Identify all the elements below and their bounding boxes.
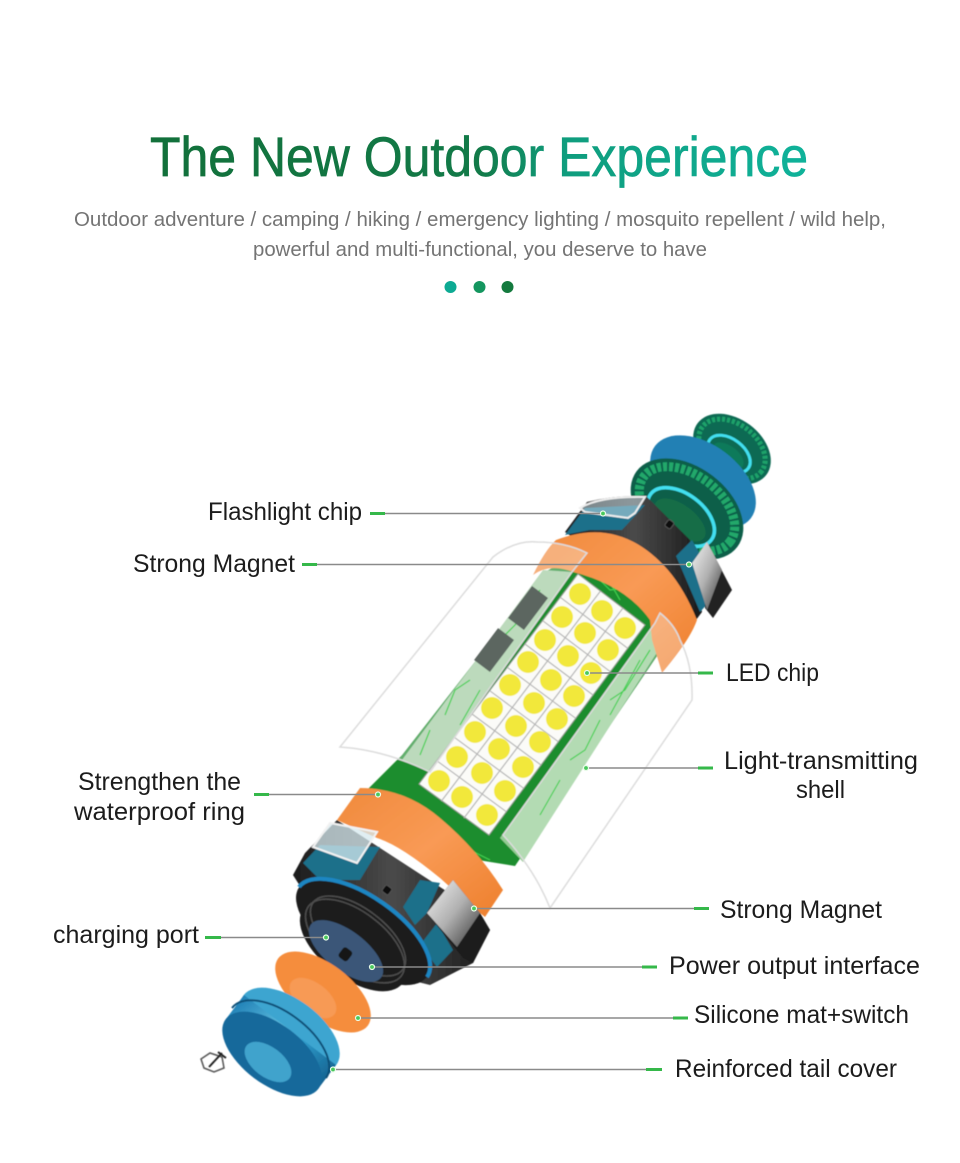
lower orange waterproof ring	[337, 788, 503, 917]
exploded flashlight illustration	[201, 399, 784, 1113]
lower black housing	[293, 820, 490, 985]
callout: Light-transmitting shell: Light-transmitting	[724, 747, 918, 775]
upper right magnet	[692, 542, 732, 618]
green circuit core	[365, 540, 668, 866]
upper teal windows	[565, 505, 720, 612]
left strip chips and traces	[420, 586, 548, 755]
callout: Strong Magnet lower: Strong Magnet	[720, 896, 882, 924]
LED panel	[419, 574, 645, 835]
upper black housing	[565, 496, 702, 628]
subtitle: Outdoor adventure / camping / hiking / emergency lighting / mosquito repellent / wild help,	[74, 209, 886, 231]
lower glass magnet	[313, 823, 377, 863]
threaded end	[284, 881, 422, 1009]
callout: Light-transmitting shell	[584, 747, 918, 804]
small screw icon	[201, 1052, 226, 1072]
upper glass magnet	[580, 497, 645, 518]
top circuit disk	[680, 399, 784, 499]
callout: Strong Magnet upper	[133, 550, 692, 578]
right circuit strip	[500, 623, 665, 862]
callout: Silicone mat+switch: Silicone mat+switch	[694, 1001, 909, 1029]
callout: Flashlight chip	[208, 498, 606, 526]
callout: Flashlight chip: Flashlight chip	[208, 498, 362, 526]
callout: Power output interface	[370, 952, 920, 980]
blue disk	[633, 416, 773, 548]
right strip traces	[540, 650, 650, 815]
left circuit strip	[402, 570, 572, 772]
callout: LED chip: LED chip	[726, 659, 819, 687]
lower right magnet	[427, 880, 490, 963]
title: The New Outdoor Experience	[150, 125, 808, 188]
callout: Silicone mat+switch	[356, 1001, 909, 1029]
callout: Strong Magnet lower	[472, 896, 882, 924]
callout: Light-transmitting shell: shell	[796, 776, 845, 804]
left transparent shell	[340, 542, 587, 772]
callout: Strengthen the waterproof ring: Strengthen the	[78, 768, 241, 796]
callout: Strong Magnet upper: Strong Magnet	[133, 550, 295, 578]
subtitle	[74, 209, 886, 261]
subtitle: powerful and multi-functional, you deserve to have	[253, 239, 707, 261]
callout: Power output interface: Power output interface	[669, 952, 920, 980]
callout: Reinforced tail cover	[330, 1055, 897, 1083]
middle circuit disk	[611, 438, 763, 580]
blue front ring	[279, 859, 447, 1005]
callout: Strengthen the waterproof ring: waterproof ring	[73, 798, 245, 826]
upper orange waterproof ring	[533, 532, 697, 673]
blue tail cover	[208, 971, 354, 1113]
callout: charging port	[53, 921, 328, 949]
orange silicone mat	[261, 936, 385, 1048]
lower teal windows	[303, 845, 453, 967]
three dots divider	[444, 281, 514, 293]
callout: Reinforced tail cover: Reinforced tail cover	[675, 1055, 897, 1083]
callout: charging port: charging port	[53, 921, 199, 949]
callout: Strengthen the waterproof ring	[73, 768, 380, 826]
callout: LED chip	[584, 659, 819, 687]
right transparent shell	[503, 613, 692, 908]
